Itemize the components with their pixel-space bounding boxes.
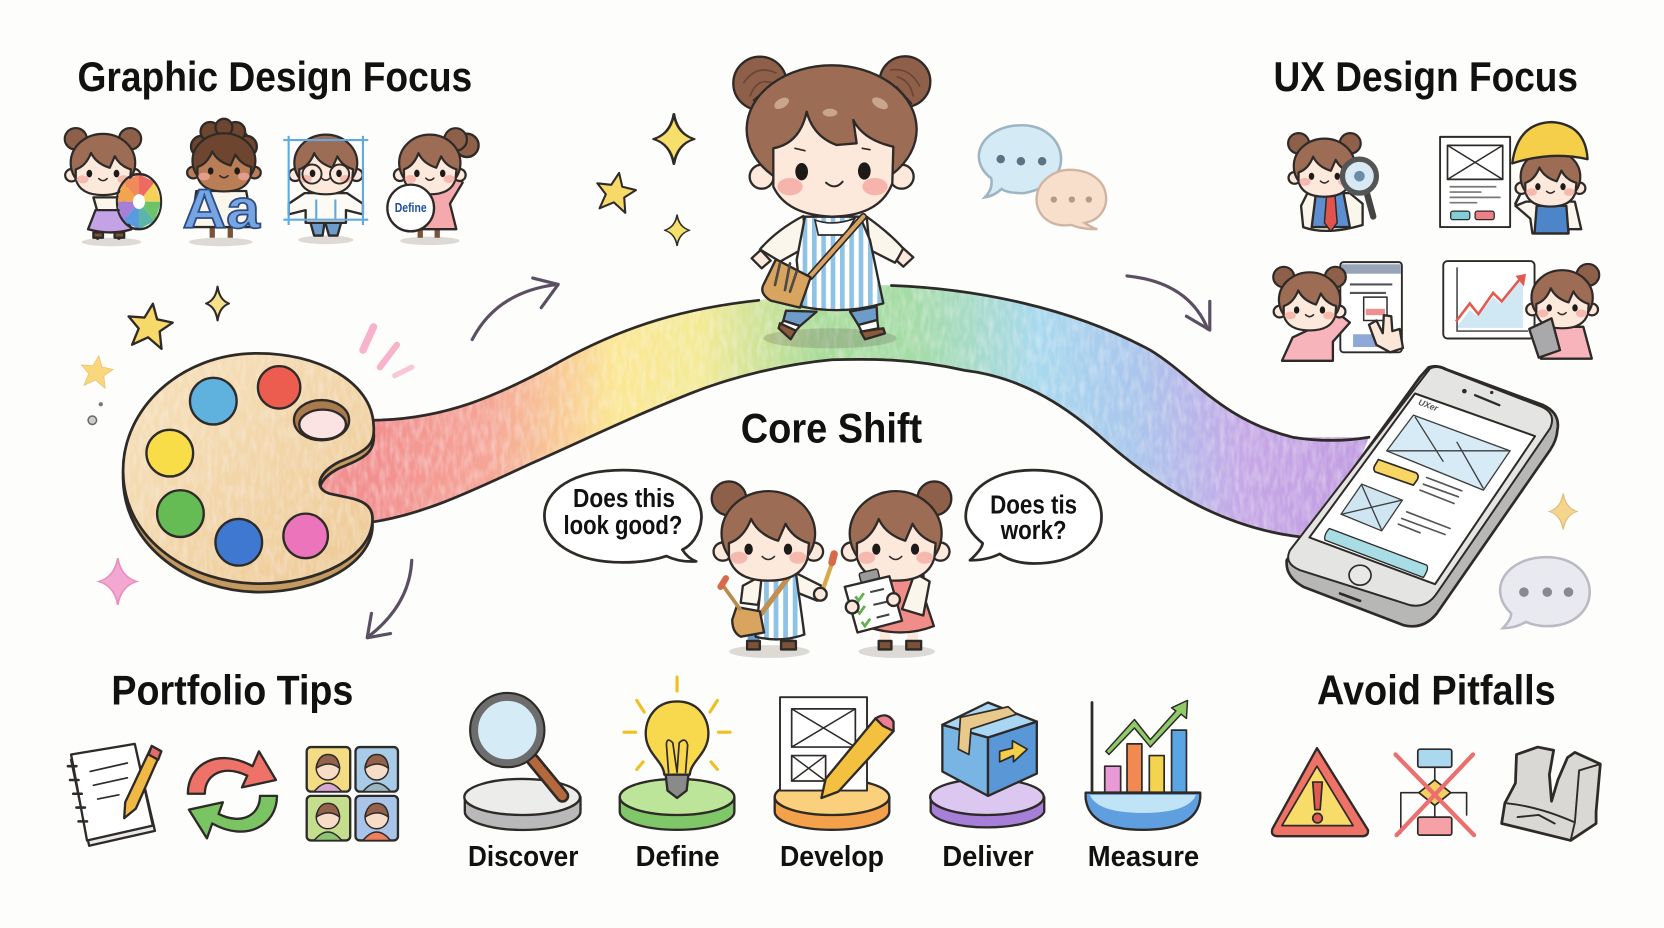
arrow: palette to portfolio tips	[367, 560, 412, 638]
panel: UX design characters	[1273, 122, 1599, 361]
icon: line chart board	[1443, 261, 1535, 339]
character: builder with hard hat	[1512, 122, 1588, 233]
bubble text: Does tis	[990, 492, 1077, 520]
bag and strap	[762, 217, 863, 308]
step: Define	[620, 677, 734, 873]
step: Measure	[1086, 700, 1200, 873]
speech bubble: peach dots	[1037, 170, 1106, 229]
screen label: UXer	[1417, 397, 1440, 414]
panel: pitfall icons	[1272, 747, 1600, 840]
heading: Avoid Pitfalls: Avoid Pitfalls	[1317, 668, 1556, 714]
icon: round sign: Define	[395, 200, 427, 215]
paint: yellow	[146, 430, 193, 476]
label: Develop	[780, 841, 884, 873]
character: main girl walking on ribbon	[733, 56, 930, 348]
label: Discover	[468, 841, 578, 873]
icon: smartphone wireframe	[1287, 366, 1558, 626]
bubble text: Does this	[573, 485, 675, 513]
arrow: path to UX focus	[1127, 276, 1210, 330]
heading: Core Shift: Core Shift	[741, 406, 922, 452]
icon: notebook and pencil	[68, 744, 161, 846]
icon: crossed out flowchart	[1396, 749, 1474, 835]
icon: iterate cycle arrows	[188, 751, 277, 838]
heading: Portfolio Tips: Portfolio Tips	[111, 668, 353, 714]
panel: graphic design characters	[65, 119, 479, 246]
step: Develop	[775, 697, 894, 873]
bubble text: work?	[1000, 517, 1067, 545]
heading: UX Design Focus: UX Design Focus	[1273, 54, 1578, 100]
panel: portfolio tip icons	[68, 744, 398, 846]
icon: magnifier	[1342, 159, 1376, 216]
icon: portrait grid	[307, 747, 398, 840]
character: kid with glasses and layout grid	[283, 135, 368, 244]
paint: pink	[283, 514, 328, 558]
speech bubble: Does this look good?	[544, 470, 701, 562]
decorations: stars and sparkles	[79, 114, 1577, 605]
label: Aa letters: Aa	[183, 178, 261, 240]
character: researcher with magnifier	[1288, 133, 1376, 231]
arms	[752, 216, 913, 268]
step: Discover	[464, 693, 580, 873]
character: girl with clipboard	[842, 481, 951, 658]
paint: red	[258, 366, 300, 409]
icon: cracked stone block	[1502, 747, 1600, 840]
wireframe: hero image	[1387, 415, 1510, 490]
panel: process steps	[464, 677, 1200, 873]
icon: hard hat	[1512, 122, 1588, 163]
bubble text: look good?	[564, 512, 682, 540]
label: Define	[636, 841, 720, 873]
character: girl holding round logo sign	[387, 128, 479, 245]
apron	[797, 217, 883, 310]
palette thumb hole	[294, 400, 349, 440]
icon: pointing hand	[1369, 315, 1403, 352]
paint: blue	[190, 378, 237, 424]
button: yellow	[1374, 459, 1418, 485]
arrow: palette to main path	[472, 278, 558, 340]
wireframe: thumbnail	[1341, 484, 1402, 531]
home button	[1349, 565, 1371, 585]
icon: colour wheel	[117, 174, 161, 229]
label: Deliver	[942, 841, 1034, 873]
paint: dark blue	[215, 519, 262, 566]
character: kid holding Aa letters	[183, 119, 261, 246]
label: Measure	[1088, 841, 1199, 873]
button: blue bar	[1325, 528, 1428, 577]
speech bubble: Does tis work?	[966, 470, 1102, 563]
character: girl with paintbrushes	[712, 481, 834, 658]
character: girl tapping interface	[1273, 262, 1403, 361]
icon: clipboard	[845, 569, 902, 632]
paint: green	[157, 490, 204, 537]
rainbow ribbon path	[313, 285, 1369, 541]
heading: Graphic Design Focus: Graphic Design Focus	[77, 54, 472, 100]
character: girl with colour wheel	[65, 128, 161, 246]
head	[733, 56, 930, 217]
speech bubble: grey dots	[1500, 557, 1590, 628]
icon: warning triangle	[1272, 748, 1368, 836]
character: girl with tablet	[1526, 264, 1599, 359]
phone screen	[1309, 393, 1535, 584]
icon: palette	[123, 353, 374, 592]
icon: wireframe document	[1440, 137, 1510, 227]
step: Deliver	[930, 702, 1044, 873]
speech bubble: blue dots	[979, 125, 1061, 197]
legs	[779, 307, 885, 339]
